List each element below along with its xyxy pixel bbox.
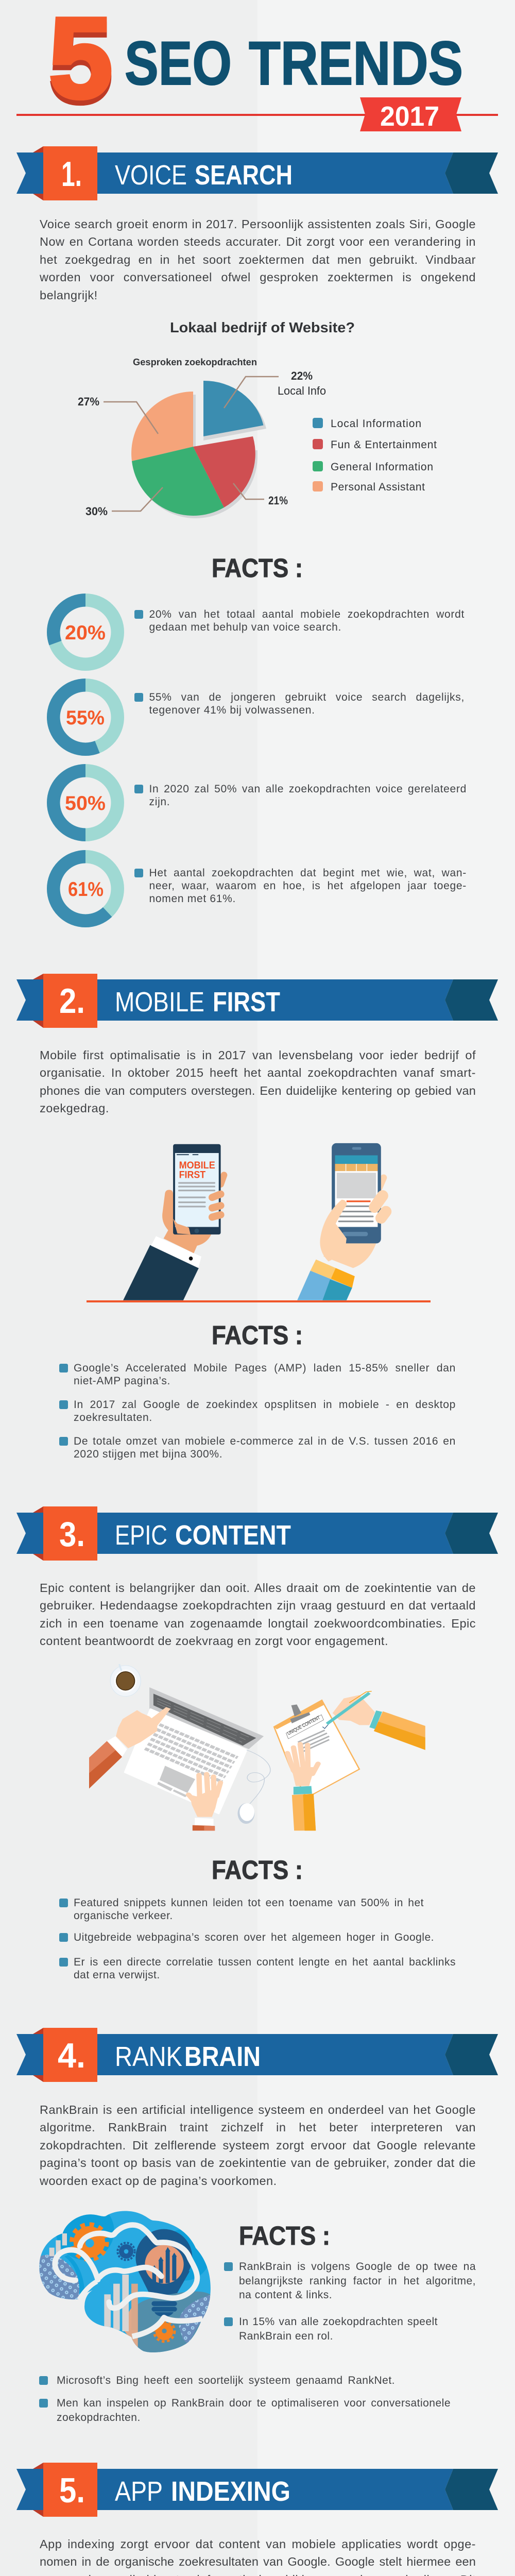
intro paragraph: phones die van computers overstegen. Een duidelijke kentering op gebied van (40, 1084, 476, 1097)
intro paragraph (40, 2537, 476, 2576)
fact 1: Featured snippets kunnen leiden tot een toename van 500% in het (74, 1897, 424, 1909)
intro paragraph: organisatie. In oktober 2015 heeft het aantal zoekopdrachten vanaf smart- (40, 1066, 476, 1079)
intro paragraph: woorden exact op de pagina’s voorkomen. (40, 2174, 277, 2188)
pie labels: 30% (85, 505, 108, 518)
pie legend: General Information (331, 461, 433, 473)
donut 20% (54, 600, 117, 664)
ribbon heading 2: 2. (59, 981, 85, 1021)
intro paragraph: RankBrain is een artificial intelligence systeem en onderdeel van het Google (40, 2103, 476, 2116)
facts heading: FACTS : (239, 2221, 330, 2250)
ribbon heading 5: INDEXING (171, 2476, 290, 2507)
fact 4: neer, waar, waarom en hoe, is het afgelopen jaar toege- (149, 880, 467, 892)
ribbon heading 3: CONTENT (175, 1520, 291, 1551)
ribbon heading 5 (16, 2463, 498, 2517)
pie labels: Local Info (278, 384, 326, 397)
fact 1: gedaan met behulp van voice search. (149, 621, 341, 633)
ribbon heading 5: APP (115, 2476, 163, 2507)
fact 1 (59, 1362, 456, 1387)
divider line (16, 114, 498, 116)
intro paragraph: nomen in de organische zoekresultaten van Google. Google stelt hiermee een (40, 2555, 476, 2568)
ribbon heading 2 (16, 974, 498, 1028)
fact 2: In 2017 zal Google de zoekindex opsplitsen in mobiele - en desktop (74, 1399, 456, 1411)
fact 3: zijn. (149, 796, 170, 808)
fact 2: RankBrain een rol. (239, 2330, 333, 2342)
fact 3: In 2020 zal 50% van alle zoekopdrachten voice gerelateerd (149, 783, 467, 795)
pie labels: 21% (268, 494, 288, 507)
fact 2 (134, 691, 465, 716)
fact 1: RankBrain is volgens Google de op twee na (239, 2261, 476, 2273)
fact 2: Uitgebreide webpagina’s scoren over het algemeen hoger in Google. (74, 1931, 434, 1943)
donut 50% (54, 771, 117, 835)
illustration: laptop and clipboard (89, 1664, 425, 1831)
left hand with phone: MOBILE (179, 1160, 215, 1171)
heading: SEO TRENDS: TRENDS (249, 29, 463, 98)
clipboard (274, 1700, 359, 1797)
fact 4: Men kan inspelen op RankBrain door te optimaliseren voor conversationele (57, 2397, 451, 2409)
facts heading: FACTS : (212, 1855, 303, 1885)
pie labels (78, 369, 326, 518)
fact 4: nomen met 61%. (149, 893, 236, 905)
intro paragraph: Mobile first optimalisatie is in 2017 van levensbelang voor ieder bedrijf of (40, 1048, 476, 1062)
chart title: Lokaal bedrijf of Website? (170, 319, 355, 335)
intro paragraph: gebruiker. Hedendaagse zoekopdrachten zijn vraag gestuurd en dat vertaald (40, 1599, 476, 1612)
ribbon heading 5: 5. (59, 2471, 85, 2510)
intro paragraph: Now en Cortana worden steeds accurater. Dit zorgt voor een verandering in (40, 235, 476, 248)
fact 1 (59, 1897, 424, 1922)
fact 4 (39, 2397, 451, 2424)
intro paragraph: Voice search groeit enorm in 2017. Persoonlijk assistenten zoals Siri, Google (40, 217, 476, 231)
hand on keyboard (188, 1774, 221, 1831)
donut 55% (54, 685, 117, 749)
pie legend: Local Information (331, 418, 421, 430)
fact 2: zoekresultaten. (74, 1412, 152, 1423)
fact 1: Google’s Accelerated Mobile Pages (AMP) laden 15-85% sneller dan (74, 1362, 456, 1374)
intro paragraph: zich in een toename van zogenaamde longtail zoekwoordcombinaties. Epic (40, 1617, 476, 1630)
ribbon heading 3: EPIC (115, 1520, 167, 1551)
mouse with cable (237, 1750, 270, 1824)
ribbon heading 3 (16, 1506, 498, 1561)
section 5: app indexing (16, 2463, 498, 2576)
orange base line (87, 1300, 431, 1302)
intro paragraph: App indexing zorgt ervoor dat content van mobiele applicaties wordt opge- (40, 2537, 476, 2551)
ribbon heading 2: MOBILE (115, 987, 204, 1018)
pie labels: 27% (78, 395, 99, 408)
intro paragraph (40, 1048, 476, 1115)
fact 3: Er is een directe correlatie tussen content lengte en het aantal backlinks (74, 1956, 456, 1968)
fact 2: In 15% van alle zoekopdrachten speelt (239, 2316, 438, 2328)
intro paragraph: algoritme. RankBrain traint zichzelf in het beter interpreteren van (40, 2121, 476, 2134)
ribbon heading 4: 4. (58, 2036, 85, 2075)
fact 3 (134, 783, 467, 808)
fact 1: organische verkeer. (74, 1910, 173, 1922)
fact 4: zoekopdrachten. (57, 2412, 141, 2424)
heading: SEO TRENDS (125, 29, 463, 98)
intro paragraph (40, 217, 476, 302)
intro paragraph: zoekgedrag. (40, 1101, 109, 1115)
year badge 2017 (360, 97, 461, 132)
left hand with phone: FIRST (179, 1170, 206, 1180)
intro paragraph (40, 2103, 476, 2188)
fact 2: 55% van de jongeren gebruikt voice search dagelijks, (149, 691, 465, 703)
donut 55%: 55% (66, 707, 105, 729)
donut 61% (54, 857, 117, 921)
intro paragraph: Epic content is belangrijker dan ooit. Alles draait om de zoekintentie van de (40, 1581, 476, 1595)
fact 4: Het aantal zoekopdrachten dat begint met wie, wat, wan- (149, 867, 467, 879)
fact 3 (59, 1956, 456, 1981)
section 3: epic content (16, 1506, 498, 1981)
fact 1: 20% van het totaal aantal mobiele zoekopdrachten wordt (149, 608, 465, 620)
ribbon heading 3: 3. (59, 1515, 85, 1554)
hand on clipboard (287, 1744, 318, 1831)
fact 3: 2020 stijgen met bijna 300%. (74, 1448, 222, 1460)
pie labels: 22% (291, 369, 313, 382)
section 4: rankbrain (16, 2028, 498, 2424)
header: title (16, 0, 498, 132)
fact 3: De totale omzet van mobiele e-commerce zal in de V.S. tussen 2016 en (74, 1435, 456, 1447)
intro paragraph: pagina’s toont op basis van de zoekintentie van de gebruiker, zonder dat die (40, 2156, 476, 2170)
facts heading: FACTS : (212, 553, 303, 583)
ribbon heading 4: BRAIN (184, 2041, 261, 2072)
donut 61%: 61% (68, 878, 104, 901)
fact 1: niet-AMP pagina’s. (74, 1375, 170, 1387)
left hand with phone (123, 1144, 224, 1300)
pie leader lines (104, 377, 279, 511)
donut 50%: 50% (65, 792, 106, 815)
ribbon heading 1: VOICE (115, 160, 187, 191)
hand writing with pen (327, 1691, 425, 1750)
ribbon heading 1 (16, 146, 498, 200)
fact 1 (134, 608, 465, 633)
clipboard label: UNIQUE CONTENT (286, 1715, 321, 1737)
ribbon heading 1: 1. (61, 155, 82, 194)
pie legend: Fun & Entertainment (331, 439, 437, 451)
fact 3: Microsoft’s Bing heeft een soortelijk systeem genaamd RankNet. (57, 2375, 395, 2386)
ribbon heading 2: FIRST (213, 987, 280, 1018)
year badge 2017: 2017 (380, 101, 439, 132)
intro paragraph: het zoekgedrag en in het soort zoektermen dat men gebruikt. Vindbaar (40, 253, 476, 266)
fact 1: belangrijkste ranking factor in het algoritme, (239, 2275, 476, 2287)
ribbon heading 4: RANK (115, 2041, 182, 2072)
intro paragraph: zokopdrachten. Dit zelflerende systeem zorgt ervoor dat Google relevante (40, 2139, 476, 2152)
intro paragraph: worden voor conversationeel ofwel gesproken zoektermen is ongekend (40, 270, 476, 284)
ribbon heading 4 (16, 2028, 498, 2082)
pie chart (131, 381, 266, 518)
pie legend (313, 418, 437, 493)
pie legend: Personal Assistant (331, 481, 425, 493)
big number 5: 5 (49, 0, 112, 127)
fact 1: na content & links. (239, 2289, 332, 2301)
intro paragraph: belangrijk! (40, 289, 98, 302)
section 2: mobile first (16, 974, 498, 1460)
fact 2: tegenover 41% bij volwassenen. (149, 704, 315, 716)
ribbon heading 1: SEARCH (195, 160, 293, 191)
laptop (125, 1687, 264, 1814)
fact 2 (59, 1399, 456, 1423)
heading: SEO TRENDS: SEO (125, 29, 232, 98)
donut 20%: 20% (65, 622, 106, 644)
intro paragraph (40, 1581, 476, 1648)
intro paragraph: content beantwoordt de zoekvraag en zorgt voor engagement. (40, 1634, 388, 1648)
facts heading: FACTS : (212, 1320, 303, 1350)
section 1: voice search (16, 146, 498, 927)
fact 3: dat erna verwijst. (74, 1969, 160, 1981)
fact 3 (59, 1435, 456, 1460)
illustration: two hands holding phones (123, 1143, 386, 1300)
chart subtitle: Gesproken zoekopdrachten (133, 357, 257, 367)
coffee cup (110, 1664, 141, 1697)
illustration: brain with gears and light bulb (39, 2211, 211, 2352)
left arm pointing (89, 1707, 170, 1789)
fact 2 (224, 2316, 438, 2342)
fact 4 (134, 867, 467, 905)
fact 1 (224, 2261, 476, 2301)
right hand with phone (297, 1143, 386, 1300)
